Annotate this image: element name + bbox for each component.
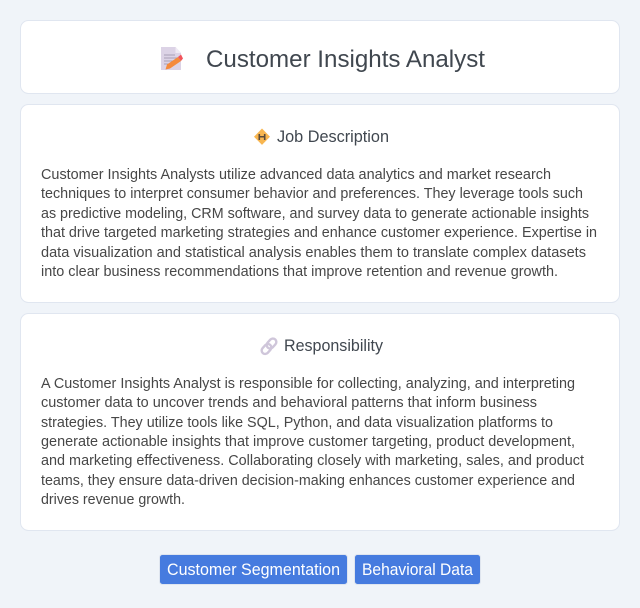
text block: job description: data visualization and statistical analysis enables them to translate complex datasets (41, 245, 586, 261)
text block: responsibility: drives revenue growth. (41, 492, 185, 508)
panel: responsibility (20, 314, 620, 530)
text block: responsibility: generate actionable insights that improve customer targeting, product development, (41, 434, 575, 450)
text block: responsibility: teams, they ensure data-driven decision-making enhances customer experience and (41, 473, 575, 489)
icon: chain link (260, 337, 278, 355)
icon: document with pencil (161, 47, 183, 70)
tag: customer segmentation (160, 554, 348, 584)
text block: job description: techniques to interpret consumer behavior and preferences. They leverage tools such (41, 186, 583, 202)
text block: job description: that drive targeted marketing strategies and enhance customer experience. Expertise in (41, 225, 597, 241)
text block: responsibility: and marketing effectiveness. Collaborating closely with marketing, sales, and product (41, 453, 584, 469)
heading: job description: Job Description (277, 128, 389, 146)
text block: responsibility: A Customer Insights Analyst is responsible for collecting, analyzing, and interpreting (41, 376, 575, 392)
text block: job description: into clear business recommendations that improve retention and revenue growth. (41, 264, 558, 280)
panel: title header (20, 20, 620, 94)
text block: job description: Customer Insights Analysts utilize advanced data analytics and market research (41, 167, 551, 183)
tag: behavioral data (354, 554, 480, 584)
text block: responsibility (41, 376, 584, 508)
text block: job description: as predictive modeling, CRM software, and survey data to generate actionable insights (41, 206, 589, 222)
tag: customer segmentation: Customer Segmentation (167, 561, 340, 579)
heading: responsibility: Responsibility (284, 337, 384, 355)
tag: behavioral data: Behavioral Data (362, 561, 474, 579)
panel: job description (20, 104, 620, 302)
icon: yellow diamond sign (254, 128, 270, 145)
title: Customer Insights Analyst (206, 46, 485, 73)
text block: responsibility: customer data to uncover trends and behavioral patterns that inform business (41, 395, 537, 411)
text block: job description (41, 167, 597, 280)
text block: responsibility: strategies. They utilize tools like SQL, Python, and data visualization platforms to (41, 415, 553, 431)
